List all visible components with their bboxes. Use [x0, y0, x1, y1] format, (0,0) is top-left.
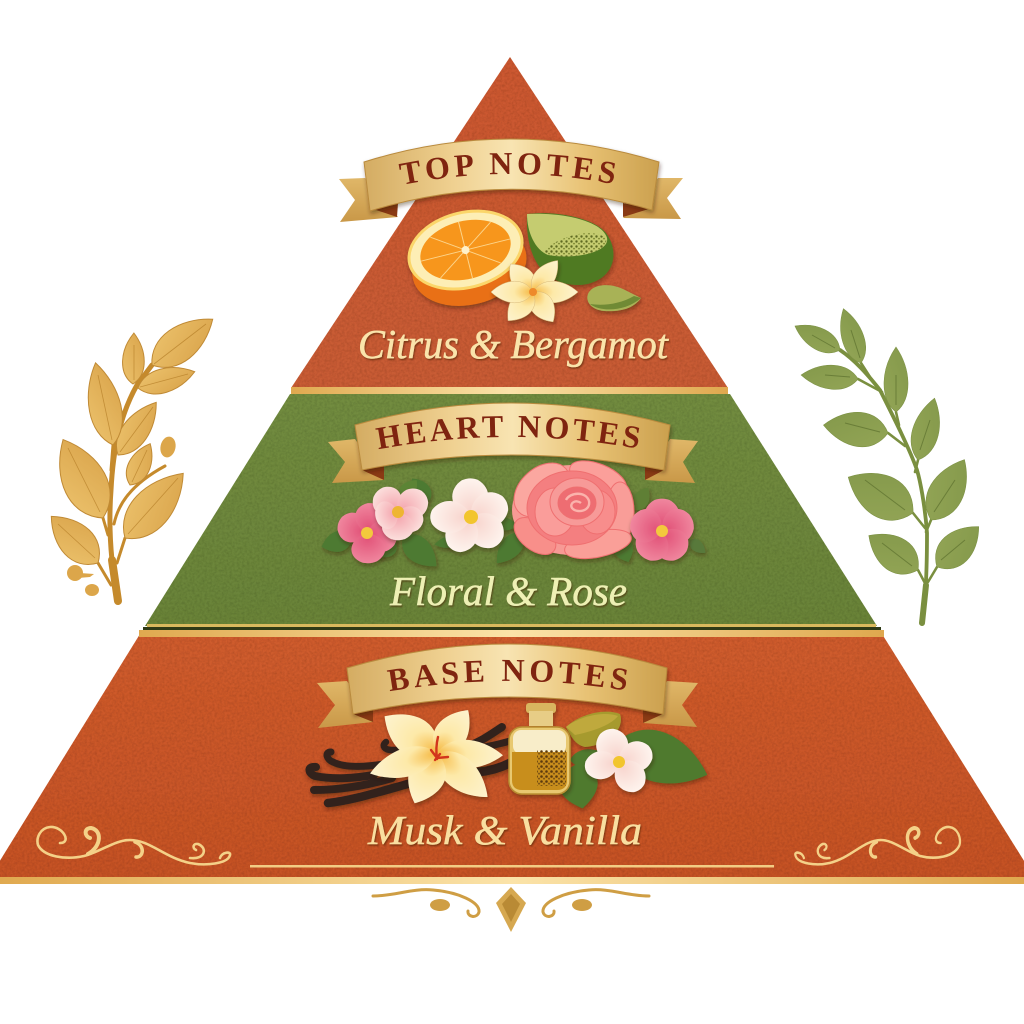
- icon: foliage: [318, 473, 709, 575]
- illustration: floral and rose: [318, 452, 709, 575]
- illustration: musk and vanilla: [309, 700, 716, 812]
- flourish: right corner: [795, 827, 960, 864]
- icon: olive pod: [566, 712, 621, 747]
- icon: vanilla beans: [309, 727, 510, 803]
- ribbon: heart notes: [328, 402, 698, 483]
- gold divider above base tier: [139, 630, 884, 637]
- gold base bar: [0, 877, 1024, 884]
- icon: white blossom: [491, 254, 578, 328]
- dark gap between heart and base tiers: [143, 627, 881, 630]
- ornament: bottom diamond and scrolls: [373, 887, 649, 932]
- heading: base notes: BASE NOTES: [386, 660, 627, 692]
- icon: pink blossom right: [626, 499, 698, 567]
- icon: diamond: [496, 887, 526, 932]
- label: floral and rose: Floral & Rose: [389, 568, 627, 614]
- icon: pink rose: [503, 452, 634, 564]
- icon: orange slice: [399, 198, 536, 318]
- branch: golden leaves: [39, 306, 223, 601]
- panel: base notes tier: [0, 627, 1024, 884]
- scroll: left: [373, 890, 479, 916]
- panel: heart notes tier: [145, 394, 877, 627]
- branch: green leaves: [790, 305, 990, 623]
- gold divider under heart tier: [147, 624, 876, 627]
- scroll: right: [543, 890, 649, 916]
- icon: pale pink blossom: [367, 481, 434, 540]
- icon: white blossom: [583, 724, 656, 798]
- ribbon: base notes: [317, 644, 698, 728]
- icon: perfume bottle: [509, 703, 570, 794]
- illustration: citrus and bergamot: [399, 198, 641, 328]
- icon: bergamot half: [527, 213, 613, 285]
- icon: white blossom: [430, 478, 513, 558]
- icon: vanilla flower: [366, 700, 503, 811]
- label: citrus and bergamot: Citrus & Bergamot: [358, 321, 670, 367]
- ribbon: top notes: [339, 138, 683, 222]
- gold divider under top tier: [291, 387, 728, 394]
- droplets: [67, 435, 178, 596]
- label: musk and vanilla: Musk & Vanilla: [367, 807, 642, 853]
- flourish: left corner: [38, 827, 230, 864]
- heading: top notes: TOP NOTES: [398, 153, 615, 184]
- heading: heart notes: HEART NOTES: [375, 416, 640, 450]
- icon: pink blossom left: [333, 500, 400, 565]
- icon: green leaves: [556, 718, 716, 812]
- panel: top notes tier: [291, 57, 728, 394]
- icon: bergamot seed pod: [587, 285, 641, 311]
